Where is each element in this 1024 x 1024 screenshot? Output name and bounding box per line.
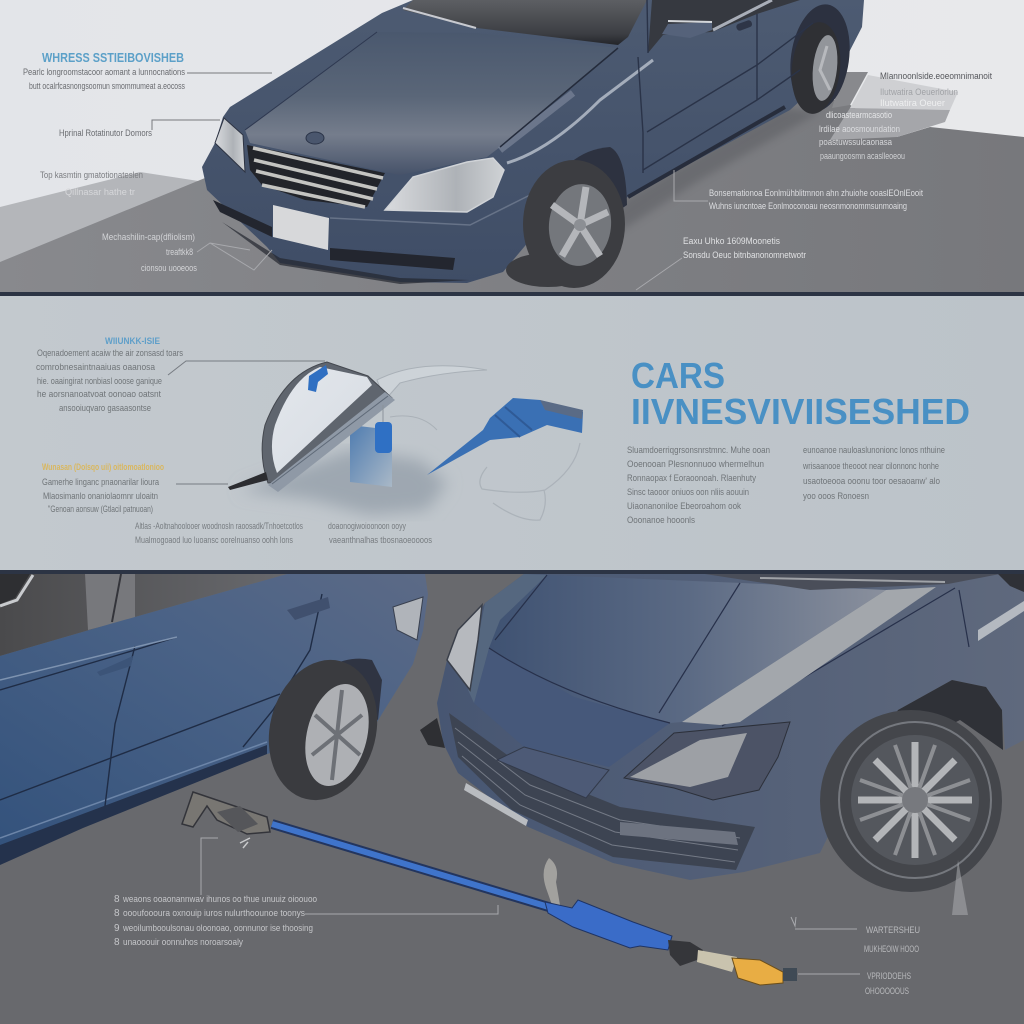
tail lamp (393, 597, 423, 640)
side mirror (662, 22, 712, 38)
callout: right upper: lrdilae aoosmoundation (819, 124, 900, 134)
callout: right lower (683, 236, 806, 260)
side trim (978, 601, 1024, 641)
callout: headlight label: Hprinal Rotatinutor Domors (59, 128, 152, 138)
text block: upper: Oqenadoement acaiw the air zonsasd toars (37, 348, 183, 359)
main title: CARS (631, 355, 725, 396)
caption: bottom centre right: vaeanthnalhas tbosnaoeoooos (329, 535, 432, 546)
callout: right upper: Mlannoonlside.eoeomnimanoit (880, 71, 992, 81)
hood crease (489, 575, 969, 726)
right labels: OHOOOOOUS (865, 986, 909, 997)
wiper blade arc (377, 366, 487, 400)
text block: upper: hie. oaaingirat nonbiasl ooose ganique (37, 376, 162, 387)
text block: upper: comrobnesaintnaaiuas oaanosa (36, 362, 156, 373)
caption: bottom centre left: Mualmogoaod luo luoansc oorelnuanso oohh lons (135, 535, 293, 546)
right car body (437, 574, 1024, 880)
left lamp (447, 605, 482, 690)
bullet list: unaooouir oonnuhos noroarsoaly (123, 937, 243, 948)
grille (247, 145, 385, 207)
door handle front (97, 656, 133, 676)
panel: washer components (0, 296, 1024, 570)
callout: right upper: paaungoosmn acaslleoeou (820, 151, 905, 161)
text column right: wrisaanooe theooot near cilonnonc honhe (802, 461, 939, 472)
text block: lower: Mlaosimanlo onaniolaomnr uloaitn (43, 491, 158, 502)
right car (420, 574, 1024, 915)
text column left (627, 445, 770, 526)
rear window corner (0, 574, 30, 604)
callout: right upper: Ilutwatira Oeuerlorlun (880, 87, 958, 97)
callout: right upper: poastuwssulcaonasa (819, 137, 892, 147)
rear wheel (787, 20, 845, 116)
bullet list: weaons ooaonannwav ihunos oo thue unuuiz oioouoo (122, 894, 317, 905)
left headlight (215, 118, 245, 172)
right labels: WARTERSHEU (866, 925, 920, 936)
callout: right lower: Eaxu Uhko 1609Moonetis (683, 236, 780, 246)
heading: top left: WHRESS SSTIEIBOVISHEB (42, 50, 184, 65)
bullet list (114, 894, 317, 948)
rear wheel arch (784, 0, 856, 116)
text block: upper (36, 348, 183, 414)
water drip (952, 860, 968, 915)
right labels (864, 925, 920, 997)
headlight (624, 722, 790, 800)
spray gun (182, 792, 270, 834)
text column left: Ooenooan Plesnonnuoo whermelhun (627, 459, 764, 470)
text column left: Sinsc taooor oniuos oon nliis aouuin (627, 487, 749, 498)
bullet list: oooufoooura oxnouip iuros nulurthoounoe toonys (123, 908, 305, 919)
callout: top left upper: butt ocalrfcasnongsoomun smommumeat a.eocoss (29, 81, 185, 91)
callout: right lower: Sonsdu Oeuc bitnbanonomnetwotr (683, 250, 806, 260)
callout: right upper: dlicoastearmcasotio (826, 110, 892, 120)
hood front panel (474, 648, 670, 767)
text block: lower: "Genoan aonsuw (Gtlacil patnuoan) (48, 504, 153, 515)
mirror housing (262, 362, 395, 492)
blue cap (375, 422, 392, 453)
bullet list: 8 (114, 894, 120, 905)
beige sleeve (697, 950, 737, 972)
text column right: eunoanoe nauloaslunonionc lonos nthuine (803, 445, 945, 456)
silver lip (464, 783, 528, 826)
left fender wedge (468, 574, 547, 703)
text column left: Ooonanoe hooonls (627, 515, 695, 526)
bullet list: weoilumbooulsonau oloonoao, oonnunor ise thoosing (122, 923, 313, 934)
left car body (0, 574, 428, 856)
front left mount (420, 718, 445, 748)
corner dark (998, 574, 1024, 592)
callout: top left upper (23, 67, 185, 91)
leader lines (201, 838, 860, 974)
caption: bottom centre right: doaonogiwoioonoon ooyy (328, 521, 406, 532)
yellow end (732, 958, 783, 985)
right car hood (489, 575, 886, 723)
car body front three-quarter (202, 0, 864, 288)
text column left: Ronnaopax f Eoraoonoah. Rlaenhuty (627, 473, 756, 484)
bumper grille (449, 713, 755, 870)
wheel (820, 710, 1002, 892)
text column left: Sluamdoerriqgrsonsnrstmnc. Muhe ooan (627, 445, 770, 456)
blue clip (308, 365, 328, 392)
wire stub (228, 472, 268, 490)
text column right: usaotoeooa ooonu toor oesaoanw' alo (803, 476, 940, 487)
blue label: WIIUNKK-ISIE (105, 336, 160, 346)
callout: right middle (709, 188, 923, 211)
callout: bumper: treaftkk8 (166, 247, 193, 257)
side window (648, 0, 800, 53)
text block: upper: he aorsnanoatvoat oonoao oatsnt (37, 389, 161, 400)
callout: right middle: Wuhns iuncntoae Eonlmoconoau neosnmonommsunmoaing (709, 201, 907, 211)
sill (0, 745, 267, 865)
leader lines (152, 73, 708, 290)
front wheel (506, 147, 627, 288)
windshield sliver (705, 574, 1000, 590)
bullet list: 9 (114, 923, 120, 934)
door seams (0, 594, 322, 806)
divider (0, 570, 1024, 574)
main title: IIVNESVIVIISESHED (631, 391, 970, 432)
bumper lines (330, 195, 530, 225)
caption: bottom centre left: Altlas -Aoltnahoolooer woodnosln raoosadk/Tnhoetcotlos (135, 521, 303, 532)
license plate (273, 205, 329, 250)
blue cylinder connector (545, 900, 672, 950)
divider (0, 292, 1024, 296)
reservoir tank (350, 425, 392, 487)
callout: bumper (102, 232, 197, 273)
bullet list: 8 (114, 937, 120, 948)
door pillars (85, 574, 135, 630)
callout: right middle: Bonsemationoa Eonlmühblitmnon ahn zhuiohe ooaslEOnlEooit (709, 188, 923, 198)
text block: lower: Gamerhe linganc pnaonarilar lioura (42, 477, 160, 488)
lower intake (213, 200, 470, 284)
blue hose (272, 824, 552, 908)
hood highlight (682, 587, 936, 725)
callout: mid left: Qillnasar hathe tr (65, 187, 135, 197)
wiper (403, 8, 476, 28)
windshield (403, 0, 647, 45)
door handle (287, 597, 330, 620)
cap string (382, 405, 384, 422)
callout: mid left (40, 170, 143, 197)
dark coupling (668, 940, 703, 966)
hood shoulder line (245, 32, 377, 130)
soft shadow (240, 450, 447, 515)
text block: lower (42, 477, 160, 515)
callout: mid left: Top kasmtin gmatotionateslen (40, 170, 143, 180)
right headlight (385, 158, 504, 212)
leader lines (168, 361, 325, 484)
yellow label: Wunasan (Dolsqo uii) oitlomoatlonioo (42, 462, 164, 473)
callout: right upper: Ilutwatira Oeuer (880, 98, 945, 108)
nozzle tool (427, 398, 583, 475)
caption: bottom centre left (135, 521, 303, 546)
text column right: yoo ooos Ronoesn (803, 491, 869, 502)
door handle (735, 19, 753, 31)
callout: bumper: Mechashilin-cap(dfliolism) (102, 232, 195, 242)
callout: right upper (819, 71, 992, 161)
bullet list: 8 (114, 908, 120, 919)
tip (783, 968, 797, 981)
fender highlight (500, 48, 653, 163)
text column left: Uiaonanoniloe Ebeoroahom ook (627, 501, 741, 512)
right labels: VPRIODOEHS (867, 971, 911, 982)
callout: top left upper: Pearlc longroomstacoor aomant a lunnocnations (23, 67, 185, 77)
text column right (802, 445, 945, 502)
callout: bumper: cionsou uooeoos (141, 263, 197, 273)
text block: upper: ansooiuqvaro gasaasontse (59, 403, 151, 414)
dark arch (867, 680, 1003, 757)
faint hose curve (390, 416, 437, 430)
small drops (240, 838, 250, 848)
left car (0, 574, 428, 865)
panel: lower car views (0, 574, 1024, 1024)
hood (245, 32, 618, 175)
panel: top car view (0, 0, 1024, 292)
left car wheel (254, 648, 392, 812)
badge (306, 132, 324, 144)
main title (631, 355, 970, 432)
caption: bottom centre right (328, 521, 432, 546)
door lines (628, 0, 813, 197)
right labels: MUKHEOIW HOOO (864, 944, 919, 955)
faint outline (480, 443, 580, 520)
fitting pipe (544, 858, 560, 905)
